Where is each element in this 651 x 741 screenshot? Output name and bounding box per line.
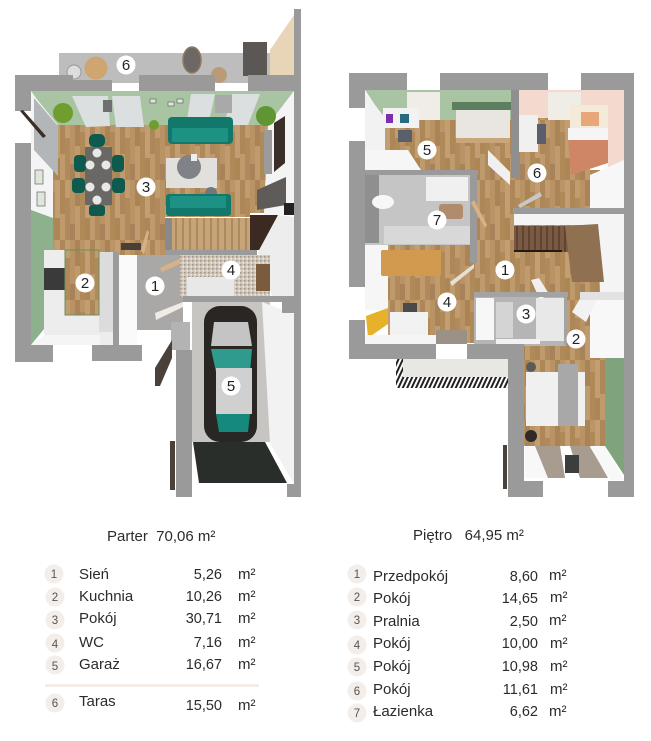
row: Pokój 5 (348, 658, 568, 676)
car (204, 306, 257, 442)
row: Przedpokój: 8,60 (510, 569, 538, 585)
left wall interior (31, 92, 58, 222)
row: WC: m² (238, 634, 256, 651)
row: Kuchnia (46, 588, 256, 606)
row: WC: WC (79, 634, 104, 651)
row: Pralnia: m² (549, 612, 566, 629)
row: Taras: m² (238, 697, 256, 714)
window frame left (20, 110, 46, 138)
row: Pralnia: Pralnia (373, 613, 420, 630)
row: Taras: Taras (79, 693, 116, 710)
terrace (59, 15, 294, 94)
room markers upper floor: 6 (533, 165, 541, 182)
row: Sień (44, 564, 256, 584)
plants (53, 103, 276, 130)
wood floor (53, 125, 268, 315)
room 6 bed (568, 105, 608, 175)
row: Pokój: 3 (52, 615, 58, 627)
floor plan: upper floor (Piętro) (349, 73, 634, 497)
wall art (35, 99, 183, 206)
room markers ground floor (76, 56, 240, 396)
room markers upper floor: 1 (501, 262, 509, 279)
row: Przedpokój: m² (549, 567, 566, 584)
row: Sień: 1 (51, 569, 57, 581)
row: Kuchnia: Kuchnia (79, 588, 134, 605)
row: Kuchnia: m² (238, 588, 256, 605)
row: Pokój 2: 2 (354, 592, 360, 604)
right white wall (264, 91, 294, 215)
row: WC: 4 (52, 639, 59, 651)
heading: Parter: Parter 70,06 m² (107, 528, 215, 545)
row: Taras: 6 (52, 698, 58, 710)
garage floor (192, 302, 270, 442)
room markers upper floor (418, 140, 586, 348)
row: Pokój 4: m² (550, 635, 568, 652)
bedroom side door (503, 445, 507, 489)
upper floor walls (349, 73, 634, 497)
row: Pokój 4: 4 (354, 640, 361, 652)
row: Garaż: 5 (52, 661, 58, 673)
stair wall (513, 208, 624, 214)
room markers upper floor: 4 (443, 294, 451, 311)
wardrobe room 6 (590, 160, 624, 208)
room 5 bed (452, 102, 512, 143)
room markers ground floor: 3 (142, 179, 150, 196)
row: Pokój 6: 6 (354, 686, 360, 698)
row: Garaż: 16,67 (186, 657, 222, 673)
WC (180, 255, 300, 302)
row: WC (46, 634, 256, 652)
row: Łazienka: 6,62 (510, 704, 538, 720)
room markers ground floor: 5 (227, 378, 235, 395)
door room 5 and wall 5/6 (488, 90, 542, 208)
row: Pokój 6: 11,61 (503, 682, 538, 698)
room 5 back wall (365, 90, 511, 120)
row: Pokój 5: m² (550, 658, 568, 675)
row: Łazienka (348, 703, 566, 722)
room 5 desk (383, 108, 419, 142)
row: Pokój 4 (348, 635, 568, 654)
row: Taras (46, 693, 256, 714)
left white wall (365, 92, 385, 150)
stairs upper (514, 224, 604, 282)
room markers upper floor: 7 (433, 212, 441, 229)
row: Pralnia (348, 610, 566, 630)
upper floor wood (385, 118, 605, 446)
kitchen green wall (31, 210, 53, 345)
row: Przedpokój: 1 (354, 569, 360, 581)
row: Sień: 5,26 (194, 567, 222, 583)
room markers upper floor: 3 (522, 306, 530, 323)
row: Pokój 2: 14,65 (502, 591, 538, 607)
row: Sień: m² (238, 566, 256, 583)
bedroom window with curtains (525, 446, 624, 480)
ground floor walls (15, 9, 301, 497)
room 4 (365, 245, 474, 344)
bedroom closet (572, 292, 624, 358)
table: Parter areas (44, 528, 259, 714)
garage side door (170, 441, 175, 490)
row: Łazienka: m² (549, 703, 566, 720)
row: Łazienka: 7 (354, 708, 360, 720)
green bedroom wall (605, 358, 624, 475)
row: Garaż: m² (238, 656, 256, 673)
row: Pokój 2 (348, 588, 568, 607)
floor plan: ground floor (Parter) (15, 9, 301, 497)
row: Pralnia: 2,50 (510, 614, 538, 630)
kitchen (31, 250, 137, 345)
bathroom (365, 170, 487, 263)
room markers ground floor: 2 (81, 275, 89, 292)
entrance door (155, 340, 172, 386)
tv and fireplace (257, 116, 294, 215)
table: Piętro areas (348, 527, 568, 722)
room markers ground floor: 1 (151, 278, 159, 295)
row: Pralnia: 3 (354, 615, 360, 627)
garage right white wall (262, 302, 294, 484)
row: Garaż: Garaż (79, 656, 120, 673)
garage apron (193, 442, 287, 483)
row: Pokój 5: 10,98 (502, 659, 538, 675)
row: Sień: Sień (79, 566, 109, 583)
row: Pokój (46, 610, 256, 630)
row: Przedpokój (348, 564, 566, 585)
row: Pokój 6: m² (550, 681, 568, 698)
row: Pokój 4: 10,00 (502, 636, 538, 652)
row: Pokój: Pokój (79, 610, 117, 627)
window room 6 (548, 92, 581, 120)
row: Pokój: m² (238, 610, 256, 627)
row: Garaż (46, 656, 256, 674)
stairs (165, 215, 294, 296)
row: Pokój 2: m² (550, 589, 568, 606)
laundry (474, 278, 568, 346)
window upper left (407, 92, 440, 122)
living room back wall (31, 91, 294, 125)
row: Pokój 6 (348, 681, 568, 700)
sofa top (168, 117, 233, 144)
room markers ground floor: 4 (227, 262, 235, 279)
room markers upper floor: 2 (572, 331, 580, 348)
row: Przedpokój: Przedpokój (373, 568, 448, 585)
dining table with chairs (72, 134, 125, 216)
row: Pokój 4: Pokój (373, 635, 411, 652)
room 6 desk (519, 115, 546, 152)
stairs wall white (514, 214, 624, 295)
pink bedroom wall (519, 90, 624, 170)
room markers ground floor: 6 (122, 57, 130, 74)
white closet room 5 (365, 150, 421, 170)
row: WC: 7,16 (194, 635, 222, 651)
heading: Piętro: Piętro 64,95 m² (413, 527, 524, 544)
row: Pokój 5: 5 (354, 662, 360, 674)
room markers upper floor: 5 (423, 142, 431, 159)
row: Kuchnia: 10,26 (186, 589, 222, 605)
row: Pokój 5: Pokój (373, 658, 411, 675)
row: Łazienka: Łazienka (373, 703, 434, 720)
balcony (396, 359, 508, 388)
sofa bottom (166, 194, 231, 216)
bedroom furniture (525, 362, 585, 442)
row: Kuchnia: 2 (52, 592, 58, 604)
row: Pokój 6: Pokój (373, 681, 411, 698)
row: Taras: 15,50 (186, 698, 222, 714)
hall (121, 230, 184, 330)
row: Pokój 2: Pokój (373, 590, 411, 607)
window curtains (34, 94, 260, 176)
rug and coffee table (166, 154, 217, 199)
row: Pokój: 30,71 (186, 611, 222, 627)
